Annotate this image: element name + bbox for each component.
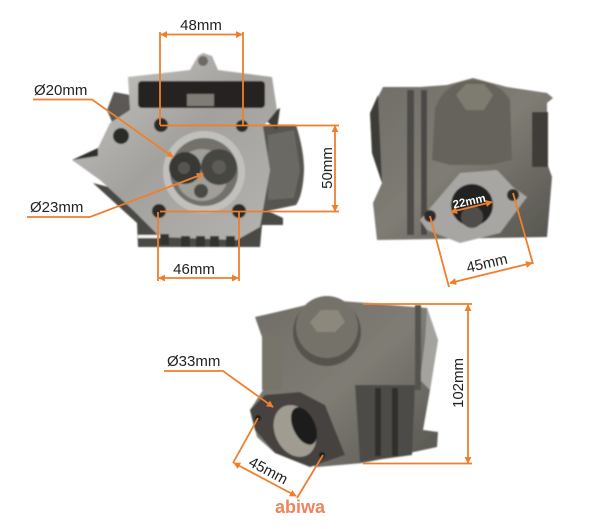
photo: exhaust side view [250, 296, 438, 467]
dimension: 48mm bolt spacing: 48mm [180, 17, 222, 34]
callout: 33mm exhaust port: Ø33mm [167, 353, 220, 370]
dimension: 22mm intake bore: 22mm [452, 193, 487, 211]
dimension: 50mm bolt spacing: 50mm [319, 147, 336, 189]
callout: 23mm valve: Ø23mm [30, 199, 83, 216]
dimension: 45mm exhaust flange [233, 418, 323, 498]
dimension: 46mm bolt spacing: 46mm [173, 261, 215, 278]
dimension: 46mm bolt spacing [158, 212, 239, 281]
brand logo: abiwa [275, 497, 326, 517]
dimension: 45mm intake flange: 45mm [465, 251, 509, 277]
dimension: 45mm exhaust flange: 45mm [246, 454, 291, 488]
callout: 33mm exhaust port [164, 353, 273, 407]
dimension: 48mm bolt spacing [160, 17, 243, 125]
callout: 20mm valve [33, 82, 173, 157]
dimension: 45mm intake flange [430, 193, 533, 287]
photo: head gasket face view [72, 53, 304, 247]
dimension: 102mm height: 102mm [450, 358, 467, 408]
dimension: 50mm bolt spacing [160, 126, 339, 212]
photo: intake side view [370, 78, 553, 243]
dimension: 102mm height [363, 304, 472, 464]
callout: 20mm valve: Ø20mm [34, 82, 87, 99]
callout: 23mm valve [27, 174, 203, 217]
